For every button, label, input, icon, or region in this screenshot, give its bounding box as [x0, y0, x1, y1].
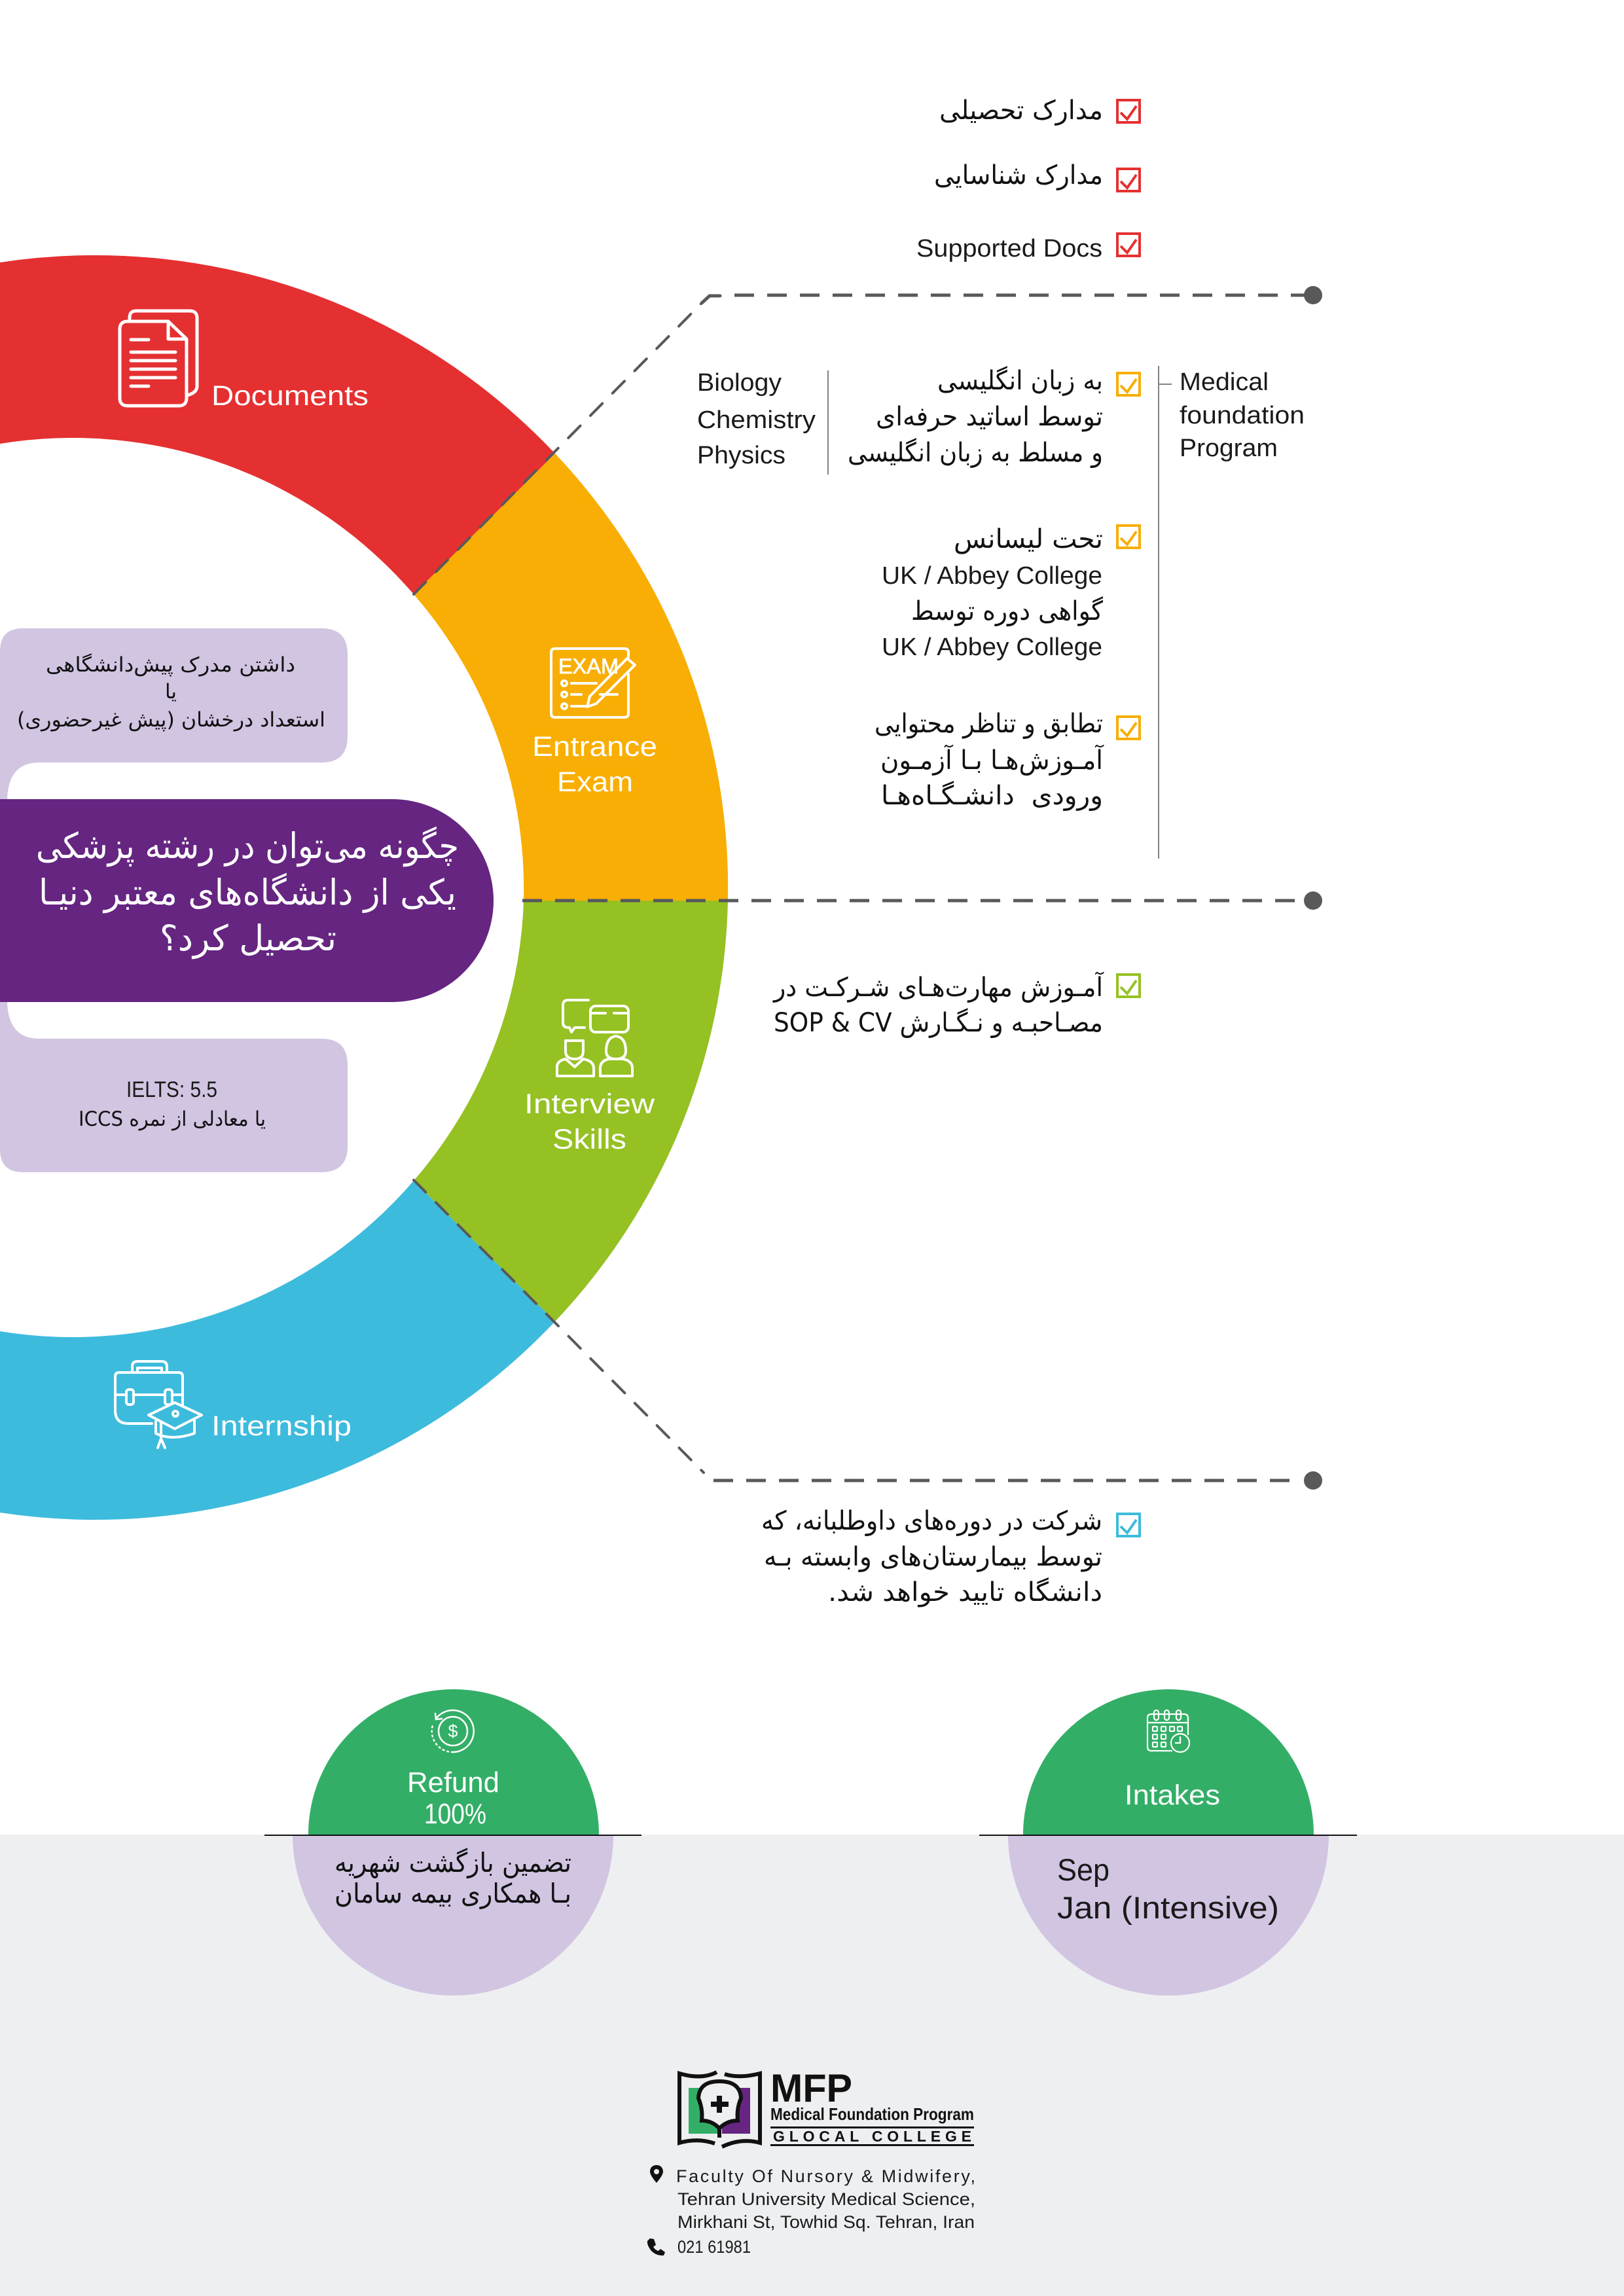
heading: main question: تحصیل کرد؟: [160, 918, 336, 959]
item: volunteer courses: شرکت در دوره‌های داوطلبانه، که: [761, 1506, 1102, 1536]
item: undergraduate certificate: گواهی دوره توسط: [911, 596, 1104, 626]
text: intake months: Jan (Intensive): [1057, 1890, 1279, 1925]
icon: calendar and clock: [1147, 1710, 1189, 1752]
ring chart: four pathway segments: [0, 255, 728, 1520]
text: academic requirement: یا: [165, 680, 177, 704]
item: sop and cv training: [772, 971, 1104, 1038]
label: interview skills: Skills: [552, 1124, 626, 1155]
bracket: medical foundation program: Program: [1180, 435, 1278, 462]
text: language requirement: [79, 1077, 266, 1131]
item: content alignment: تطابق و تناظر محتوایی: [875, 709, 1103, 739]
icon: interview people: [557, 1000, 632, 1076]
panel: intakes: [979, 1689, 1357, 1996]
label: refund 100%: [407, 1767, 499, 1830]
text: tuition guarantee: [334, 1847, 571, 1909]
icon: exam sheet and pencil: EXAM: [558, 655, 619, 678]
connector: middle dashed line: [522, 891, 1322, 910]
icon: location pin: [650, 2165, 663, 2183]
text: academic requirement: استعداد درخشان (پیش غیرحضوری): [17, 708, 325, 732]
label: entrance exam: Exam: [557, 766, 633, 798]
icon: exam sheet and pencil: [551, 649, 635, 717]
item: sop and cv training: مصـاحبـه و نـگـارش SOP & CV: [774, 1008, 1103, 1038]
label: intakes: Intakes: [1125, 1780, 1220, 1811]
text: science subjects: Chemistry: [697, 406, 816, 434]
checkbox: [1117, 526, 1140, 548]
checkbox: [1117, 169, 1140, 191]
checklist: interview skills: [772, 971, 1140, 1038]
checklist: internship: [761, 1506, 1140, 1607]
item: academic documents: مدارک تحصیلی: [939, 96, 1103, 126]
item: volunteer courses: توسط بیمارستان‌های وابسته بـه: [764, 1542, 1102, 1572]
item: volunteer courses: [761, 1506, 1102, 1607]
text: phone number: 021 61981: [677, 2237, 751, 2257]
text: science subjects: Physics: [697, 442, 785, 469]
label: refund 100%: 100%: [424, 1798, 486, 1830]
logo: wordmark: [770, 2066, 974, 2146]
icon: refund coin: [432, 1710, 474, 1752]
segment: documents: [0, 255, 555, 594]
item: undergraduate certificate: [882, 524, 1104, 661]
panel: lilac requirements backing: [0, 628, 348, 1172]
icon: documents: [120, 311, 197, 406]
label: interview skills: [524, 1088, 655, 1155]
icon: refund coin: $: [448, 1721, 458, 1741]
text: science subjects: Biology: [697, 369, 782, 397]
label: internship: Internship: [211, 1410, 352, 1442]
icon: briefcase and graduation cap: [115, 1361, 202, 1448]
logo: wordmark: GLOCAL COLLEGE: [773, 2128, 971, 2145]
item: content alignment: آمـوزش‌هـا بـا آزمـون: [880, 744, 1104, 776]
item: content alignment: ورودی دانشـگـاه‌هـا: [881, 781, 1103, 811]
segment: interview skills: [414, 901, 728, 1321]
logo: MFP book emblem: [679, 2072, 760, 2147]
checklist: documents: [916, 96, 1140, 262]
logo: wordmark: MFP: [770, 2066, 852, 2110]
item: taught in english: توسط اساتید حرفه‌ای: [876, 402, 1103, 432]
checkbox: [1117, 373, 1140, 395]
text: science subjects: [697, 369, 816, 469]
logo: wordmark: Medical Foundation Program: [770, 2104, 974, 2124]
panel: refund: [264, 1689, 641, 1996]
item: supported docs: Supported Docs: [916, 235, 1102, 262]
item: undergraduate certificate: UK / Abbey College: [882, 562, 1102, 590]
segment: entrance exam: [414, 454, 728, 901]
text: address: Tehran University Medical Science,: [677, 2189, 975, 2209]
item: identity documents: مدارک شناسایی: [934, 160, 1103, 190]
text: tuition guarantee: تضمین بازگشت شهریه: [334, 1847, 571, 1878]
bracket: medical foundation program: Medical: [1180, 368, 1269, 396]
text: intake months: Sep: [1057, 1852, 1110, 1887]
checkbox: [1117, 1514, 1140, 1536]
bracket: medical foundation program: foundation: [1180, 402, 1305, 429]
heading: main question: چگونه می‌توان در رشته پزشکی: [36, 825, 459, 867]
text: academic requirement: داشتن مدرک پیش‌دانشگاهی: [46, 653, 295, 677]
item: taught in english: به زبان انگلیسی: [937, 366, 1103, 396]
label: entrance exam: Entrance: [532, 731, 657, 762]
item: undergraduate certificate: UK / Abbey College: [882, 634, 1102, 661]
heading: main question: یکی از دانشگاه‌های معتبر دنیـا: [39, 872, 456, 913]
checkbox: [1117, 100, 1140, 122]
checkbox: [1117, 975, 1140, 997]
text: language requirement: یا معادلی از نمره ICCS: [79, 1107, 266, 1131]
label: interview skills: Interview: [524, 1088, 655, 1120]
label: entrance exam: [532, 731, 657, 798]
panel: purple title pill: [0, 799, 494, 1002]
text: tuition guarantee: بـا همکاری بیمه سامان: [334, 1878, 571, 1909]
text: intake months: [1057, 1852, 1279, 1925]
icon: phone: [647, 2238, 665, 2255]
segment: internship: [0, 1181, 555, 1520]
bracket: medical foundation program: [1158, 366, 1305, 859]
heading: main question: [36, 825, 459, 959]
text: language requirement: IELTS: 5.5: [126, 1077, 217, 1102]
connector: top dashed line: [414, 286, 1322, 594]
item: undergraduate certificate: تحت لیسانس: [954, 524, 1103, 554]
checkbox: [1117, 717, 1140, 739]
item: volunteer courses: دانشگاه تایید خواهد شد.: [828, 1577, 1102, 1607]
connector: bottom dashed line: [414, 1180, 1322, 1490]
item: taught in english: و مسلط به زبان انگلیسی: [848, 438, 1103, 468]
text: academic requirement: [17, 653, 325, 732]
item: taught in english: [848, 366, 1103, 468]
label: refund 100%: Refund: [407, 1767, 499, 1799]
text: address: Faculty Of Nursory & Midwifery,: [676, 2166, 975, 2186]
label: documents: Documents: [211, 380, 369, 412]
checkbox: [1117, 234, 1140, 256]
item: sop and cv training: آمـوزش مهارت‌هـای شـرکـت در: [772, 971, 1104, 1003]
text: address: Mirkhani St, Towhid Sq. Tehran, Iran: [677, 2212, 975, 2232]
checklist: entrance exam: [848, 366, 1140, 811]
item: content alignment: [875, 709, 1104, 811]
text: address: [676, 2166, 975, 2232]
